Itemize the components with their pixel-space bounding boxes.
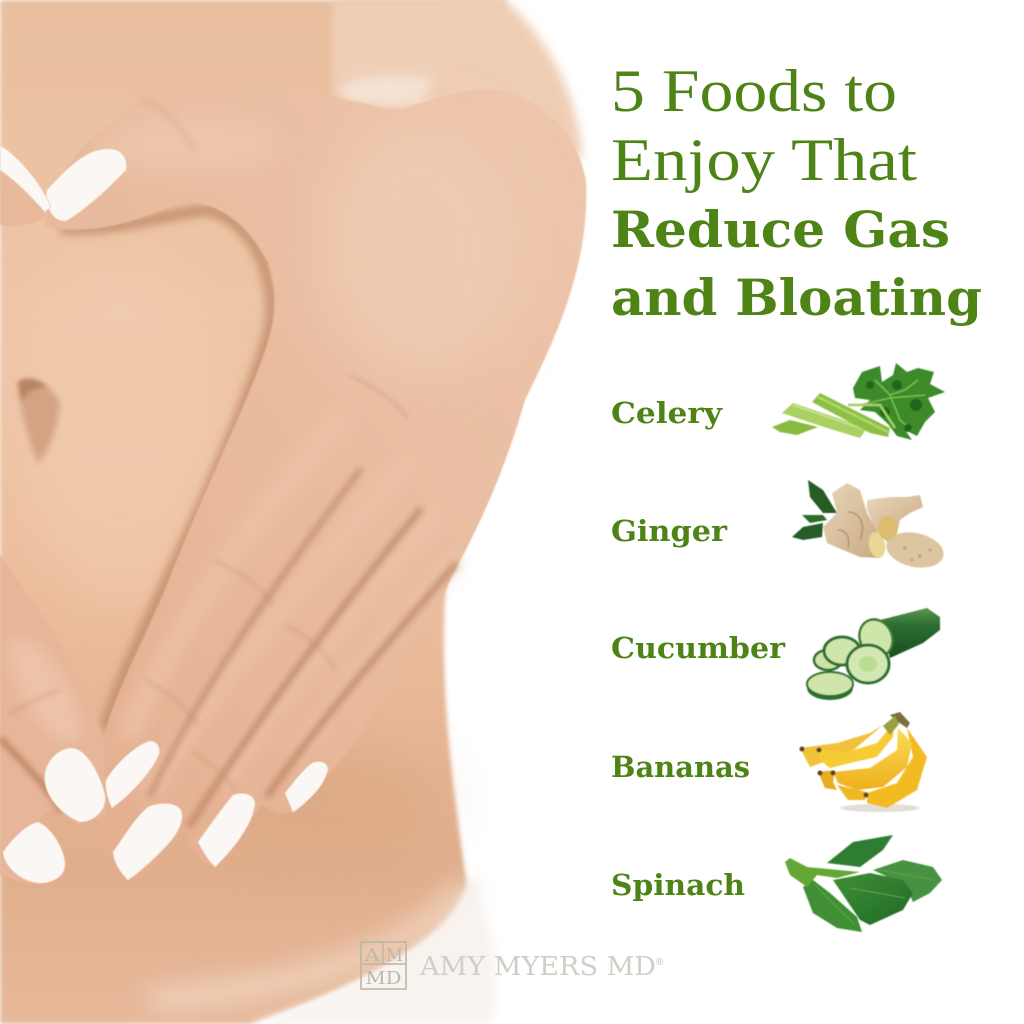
title — [611, 58, 982, 327]
finger separations — [140, 100, 455, 825]
hand shadow on belly — [60, 210, 271, 730]
white garment — [250, 885, 496, 1024]
logo mark: A — [363, 945, 381, 966]
label: Ginger: Ginger — [611, 514, 728, 548]
label: Cucumber: Cucumber — [611, 631, 786, 665]
logo: Amy Myers MD — [361, 942, 664, 989]
navel — [18, 380, 60, 464]
title: and Bloating — [611, 268, 982, 327]
left hand fingers — [0, 555, 106, 885]
photo: torso and hands — [0, 0, 586, 1024]
right hand — [45, 86, 586, 880]
title: Enjoy That — [611, 127, 917, 193]
knuckle creases — [145, 375, 408, 790]
upper arm (out of focus) — [420, 0, 582, 160]
icon: bananas — [800, 712, 927, 812]
logo wordmark: AMY MYERS MD — [419, 952, 656, 982]
back-of-hand highlight — [315, 120, 525, 380]
logo: Amy Myers MD: ® — [656, 957, 664, 968]
icon: ginger — [792, 480, 947, 573]
nails — [0, 145, 328, 883]
logo mark: M — [386, 945, 403, 966]
logo mark: MD — [366, 968, 402, 989]
torso — [0, 0, 505, 1024]
icon: spinach — [785, 835, 942, 932]
title: 5 Foods to — [611, 58, 897, 124]
icon: celery — [772, 363, 945, 440]
left thumb tip — [0, 150, 52, 226]
label: Spinach: Spinach — [611, 868, 745, 902]
label: Bananas: Bananas — [611, 750, 750, 784]
food labels — [611, 396, 786, 902]
icon: cucumber — [807, 608, 940, 700]
title: Reduce Gas — [611, 200, 950, 259]
logo mark — [361, 942, 406, 989]
finger highlights — [130, 420, 455, 790]
label: Celery: Celery — [611, 396, 723, 430]
